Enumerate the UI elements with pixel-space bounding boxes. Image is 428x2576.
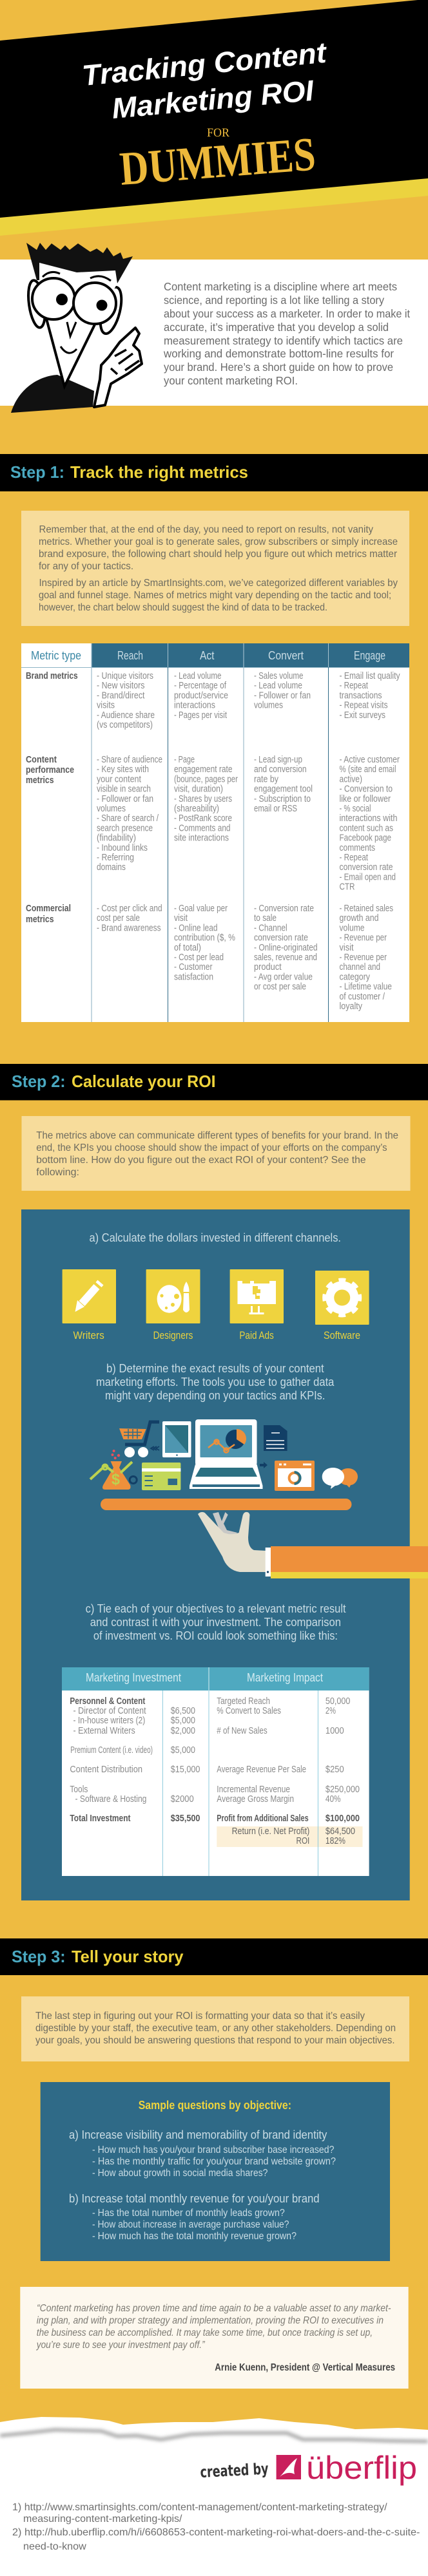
row: content performance metrics: visible in search: [97, 784, 151, 795]
column: impact values: $64,500: [326, 1826, 355, 1837]
metrics table: [21, 643, 409, 1022]
column: impact items: % Convert to Sales: [217, 1706, 281, 1716]
row: content performance metrics: - Repeat: [339, 853, 368, 863]
row: brand metrics: - Pages per visit: [174, 710, 227, 721]
column: impact items: Incremental Revenue: [217, 1785, 290, 1795]
objective a: - How about growth in social media shares?: [92, 2168, 268, 2179]
row: content performance metrics: - Active customer: [339, 755, 400, 765]
quote text: the business can be accomplished. It may take some time, but once tracking is set up,: [37, 2327, 373, 2338]
investment vs impact table: [62, 1667, 369, 1876]
row: brand metrics: - Repeat: [339, 681, 368, 691]
row: commercial metrics: category: [339, 972, 371, 982]
row: commercial metrics: to sale: [254, 913, 277, 923]
row: content performance metrics: - Page: [174, 755, 195, 765]
row: content performance metrics: comments: [339, 843, 375, 853]
quote panel: [20, 2287, 409, 2389]
column: investment amounts: $2,000: [171, 1726, 195, 1736]
panel: step 1 intro: for any of your tactics.: [39, 561, 133, 572]
row: commercial metrics: growth and: [339, 913, 379, 923]
table header: Act: [200, 649, 214, 662]
glasses: [32, 278, 75, 319]
row: content performance metrics: - % social: [339, 804, 371, 814]
table header: Convert: [268, 649, 304, 662]
objective a: [69, 2128, 336, 2179]
column: investment items: Total Investment: [70, 1814, 131, 1824]
label: designers: Designers: [153, 1329, 193, 1341]
objective b: [69, 2192, 320, 2242]
row: content performance metrics: - Key sites with: [97, 764, 149, 775]
row: content performance metrics: metrics: [26, 775, 54, 786]
row: content performance metrics: conversion rate: [339, 862, 393, 873]
objective b: - Has the total number of monthly leads grown?: [92, 2208, 285, 2219]
row: commercial metrics: of customer /: [339, 992, 385, 1002]
intro band: [0, 260, 428, 406]
row: content performance metrics: - Share of search /: [97, 813, 159, 824]
row: content performance metrics: - Subscription to: [254, 794, 311, 804]
column: impact items: [217, 1696, 309, 1846]
intro text: working and demonstrate bottom-line results for: [163, 347, 394, 360]
column: impact items: Targeted Reach: [217, 1696, 270, 1707]
row: commercial metrics: loyalty: [339, 1001, 363, 1012]
title: Tracking Content: [81, 36, 329, 92]
row: content performance metrics: content such as: [339, 823, 393, 833]
row: content performance metrics: - Referring: [97, 853, 134, 863]
panel: step 2 intro: The metrics above can communicate different types of benefits for your brand. In the: [36, 1130, 398, 1141]
panel: step 3 intro: your goals, you should be answering questions that respond to your main objectives.: [35, 2035, 394, 2046]
column: investment items: - External Writers: [73, 1726, 135, 1736]
row: commercial metrics: - Brand awareness: [97, 923, 161, 933]
row: content performance metrics: volumes: [97, 804, 126, 814]
row: content performance metrics: CTR: [339, 882, 355, 893]
references: 2) http://hub.uberflip.com/h/i/6608653-content-marketing-roi-what-doers-and-the-c-suite-: [12, 2527, 420, 2538]
quote text: you’re sure to see your investment pay off.”: [36, 2340, 205, 2351]
row: brand metrics: - Repeat visits: [339, 701, 388, 711]
hand: [198, 1512, 266, 1572]
row: content performance metrics: engagement tool: [254, 784, 313, 795]
row: content performance metrics: - Comments and: [174, 823, 231, 833]
row: content performance metrics: - Lead sign-up: [254, 755, 302, 765]
column: impact values: $250: [326, 1765, 344, 1775]
table headers: [86, 1671, 323, 1684]
row: content performance metrics: and conversion: [254, 764, 307, 775]
step b text: might vary depending on your tactics and KPIs.: [105, 1389, 325, 1402]
column: investment items: Content Distribution: [70, 1765, 142, 1775]
row: commercial metrics: channel and: [339, 962, 380, 972]
row: content performance metrics: domains: [97, 862, 126, 873]
row: brand metrics: - Follower or fan: [254, 690, 311, 701]
icon: red dots: [111, 1450, 120, 1459]
quote attribution: Arnie Kuenn, President @ Vertical Measures: [215, 2362, 395, 2373]
row: content performance metrics: Facebook page: [339, 833, 391, 844]
row: content performance metrics: interactions with: [339, 813, 397, 824]
column: investment items: [70, 1696, 153, 1824]
row: commercial metrics: - Channel: [254, 923, 287, 933]
row: content performance metrics: engagement rate: [174, 764, 232, 775]
row: content performance metrics: [26, 754, 400, 893]
row: brand metrics: - Percentage of: [174, 681, 227, 691]
intro text: your brand. Here’s a short guide on how to prove: [164, 361, 393, 374]
panel: step 3 intro: The last step in figuring out your ROI is formatting your data so that it’s easily: [35, 2011, 365, 2022]
row: commercial metrics: - Customer: [174, 962, 213, 972]
row: content performance metrics: search presence: [97, 823, 153, 833]
references: need-to-know: [23, 2541, 86, 2552]
panel: step 2 intro: bottom line. How do you figure out the exact ROI of your content? See the: [36, 1155, 366, 1166]
icon: dummies character: [11, 243, 142, 413]
step 1 heading: Step 1:: [10, 462, 64, 482]
intro text: measurement strategy to identify which tactics are: [164, 334, 403, 347]
row: content performance metrics: active): [339, 774, 362, 784]
row: content performance metrics: - PostRank score: [174, 813, 232, 824]
column: impact values: 2%: [326, 1706, 336, 1716]
row: commercial metrics: or cost per sale: [254, 982, 306, 992]
step c text: and contrast it with your investment. The comparison: [90, 1616, 341, 1629]
title: Marketing ROI: [110, 74, 316, 125]
icon: browser window: [275, 1461, 315, 1491]
column: impact items: Profit from Additional Sales: [217, 1814, 309, 1824]
icon: credit card: [142, 1463, 180, 1490]
panel: step 1 intro: brand exposure, the following chart should help you figure out which metrics matter: [39, 549, 398, 560]
row: brand metrics: - Sales volume: [254, 671, 303, 681]
row: brand metrics: [26, 670, 400, 730]
icon: uberflip mark: [277, 2455, 301, 2479]
panel: step 1 intro: Inspired by an article by SmartInsights.com, we’ve categorized different variables by: [39, 578, 398, 589]
intro text: accurate, it’s imperative that you develop a solid: [164, 321, 389, 334]
panel: sample questions: [41, 2082, 390, 2261]
objective a: - Has the monthly traffic for you/your brand website grown?: [92, 2156, 336, 2167]
icon: money bag: $: [112, 1471, 121, 1488]
row: content performance metrics: - Share of audience: [97, 755, 162, 765]
panel heading: Sample questions by objective:: [139, 2099, 291, 2112]
header banner: [0, 0, 428, 236]
row: commercial metrics: visit: [174, 913, 188, 923]
row: content performance metrics: visit, duration): [174, 784, 223, 795]
row: brand metrics: - Exit surveys: [339, 710, 385, 721]
references: [12, 2502, 420, 2552]
icon: software gear: [315, 1271, 369, 1325]
row: brand metrics: - Audience share: [97, 710, 155, 721]
table header: Engage: [354, 649, 385, 662]
icon: writers pencil: [63, 1269, 116, 1323]
created by uberflip logo: [200, 2450, 417, 2486]
quote text: [36, 2303, 391, 2351]
row: content performance metrics: site interactions: [174, 833, 229, 844]
column: impact values: $100,000: [326, 1814, 360, 1824]
label: writers: Writers: [73, 1329, 104, 1341]
row: commercial metrics: conversion rate: [254, 933, 308, 943]
created by uberflip logo: überflip: [306, 2450, 417, 2486]
column: investment items: Tools: [70, 1785, 88, 1795]
label: paid ads: Paid Ads: [239, 1329, 274, 1341]
for dummies wordmark: FOR: [207, 126, 229, 140]
step c text: c) Tie each of your objectives to a relevant metric result: [86, 1602, 346, 1615]
row: brand metrics: - Lead volume: [254, 681, 302, 691]
icon: money bag: [90, 1461, 132, 1490]
pointing hand: [94, 328, 142, 407]
step c text: of investment vs. ROI could look something like this:: [93, 1629, 338, 1642]
panel: step 3 intro: [21, 1996, 409, 2061]
row: content performance metrics: - Conversion to: [339, 784, 393, 795]
body: [11, 375, 94, 413]
column: impact values: 40%: [326, 1794, 341, 1804]
column: investment items: - Software & Hosting: [75, 1794, 146, 1804]
row: commercial metrics: satisfaction: [174, 972, 213, 982]
step 3 heading: [0, 1938, 428, 1975]
step 2 heading: Calculate your ROI: [72, 1072, 216, 1091]
row: brand metrics: - Unique visitors: [97, 671, 153, 681]
row: brand metrics: visits: [97, 701, 115, 711]
label: software: Software: [324, 1329, 360, 1341]
row: brand metrics: - Brand/direct: [97, 690, 144, 701]
row: commercial metrics: contribution ($, %: [174, 933, 235, 943]
nose and smile: [61, 322, 77, 353]
panel: calculate ROI: [21, 1209, 410, 1900]
row: content performance metrics: rate by: [254, 774, 279, 784]
panel: step 1 intro: Remember that, at the end of the day, you need to report on results, not vanity: [39, 524, 373, 535]
intro text: about your success as a marketer. In order to make it: [164, 307, 410, 320]
for dummies wordmark: DUMMIES: [118, 128, 317, 196]
row: content performance metrics: % (site and email: [339, 764, 396, 775]
row: content performance metrics: your content: [97, 774, 141, 784]
panel: step 1 intro: [21, 511, 409, 626]
row: content performance metrics: email or RSS: [254, 804, 297, 814]
table header: [31, 649, 385, 662]
illustration: hand serving marketing tools on a tray: [90, 1419, 428, 1578]
row: commercial metrics: [26, 903, 393, 1012]
panel: step 2 intro: end, the KPIs you choose should show the impact of your efforts on the company’s: [36, 1142, 387, 1153]
row: commercial metrics: - Revenue per: [339, 952, 387, 963]
row: content performance metrics: - Shares by users: [174, 794, 232, 804]
table headers: Marketing Impact: [247, 1671, 323, 1684]
torn paper edge: [0, 2417, 428, 2576]
icon: document: [264, 1425, 287, 1451]
step 2 heading: Step 2:: [12, 1072, 66, 1091]
row: commercial metrics: - Revenue per: [339, 933, 387, 943]
highlight: return and ROI: [217, 1826, 362, 1847]
column: investment items: - Director of Content: [73, 1706, 146, 1716]
row: brand metrics: interactions: [174, 701, 215, 711]
column: impact items: Average Revenue Per Sale: [217, 1765, 306, 1775]
row: commercial metrics: - Retained sales: [339, 904, 393, 914]
column: impact items: # of New Sales: [217, 1726, 268, 1736]
table header: Metric type: [31, 649, 81, 662]
panel: step 3 intro: digestible by your staff, the executive team, or any other stakeholders. Depending on: [35, 2023, 396, 2034]
panel: step 2 intro: following:: [36, 1167, 79, 1178]
row: brand metrics: product/service: [174, 690, 228, 701]
column: investment items: Personnel & Content: [70, 1696, 145, 1707]
row: content performance metrics: Content: [26, 754, 57, 765]
column: investment items: - In-house writers (2): [73, 1716, 145, 1726]
row: content performance metrics: - Follower or fan: [97, 794, 153, 804]
objective b: - How about increase in average purchase value?: [92, 2219, 289, 2230]
panel: step 2 intro: [22, 1116, 410, 1191]
row: content performance metrics: (shareability): [174, 804, 219, 814]
step 2 heading: [0, 1064, 428, 1100]
objective a: a) Increase visibility and memorability of brand identity: [69, 2128, 327, 2141]
quote text: ing plan, and with proper strategy and implementation, proving the ROI to executives in: [37, 2315, 384, 2326]
step b text: [96, 1362, 335, 1402]
step 3 heading: Step 3:: [12, 1947, 66, 1966]
icon: speech bubbles: [322, 1468, 358, 1489]
column: investment items: Premium Content (i.e. video): [70, 1745, 153, 1756]
row: content performance metrics: (findability): [97, 833, 136, 844]
face: [39, 264, 117, 386]
hair: [26, 243, 133, 283]
intro text: Content marketing is a discipline where art meets: [164, 280, 397, 293]
column: impact values: 1000: [326, 1726, 344, 1736]
row: commercial metrics: - Cost per click and: [97, 904, 162, 914]
icon: small gear: [130, 1476, 137, 1484]
row: content performance metrics: performance: [26, 764, 74, 775]
row: commercial metrics: product: [254, 962, 282, 972]
step 1 heading: Track the right metrics: [70, 462, 248, 482]
references: measuring-content-marketing-kpis/: [23, 2514, 182, 2524]
tray: [101, 1499, 352, 1510]
column: investment amounts: $2000: [171, 1794, 194, 1804]
objective b: b) Increase total monthly revenue for you/your brand: [69, 2192, 320, 2205]
icon: designers palette: [146, 1269, 200, 1323]
step a text: a) Calculate the dollars invested in different channels.: [89, 1231, 341, 1244]
row: commercial metrics: - Cost per lead: [174, 952, 224, 963]
step b text: marketing efforts. The tools you use to gather data: [96, 1376, 335, 1388]
row: commercial metrics: - Lifetime value: [339, 982, 392, 992]
row: content performance metrics: - Inbound links: [97, 843, 148, 853]
eyebrows: [43, 272, 111, 281]
table header: Reach: [117, 649, 143, 662]
column: investment amounts: [171, 1706, 200, 1824]
step c text: [86, 1602, 346, 1642]
column: impact values: 182%: [326, 1836, 345, 1846]
column: impact values: [326, 1696, 360, 1846]
step 3 heading: Tell your story: [72, 1947, 184, 1966]
row: commercial metrics: visit: [339, 943, 353, 953]
row: content performance metrics: (bounce, pages per: [174, 774, 238, 784]
intro text: your content marketing ROI.: [164, 374, 298, 387]
step 1 heading: [0, 454, 428, 491]
row: content performance metrics: like or follower: [339, 794, 391, 804]
references: 1) http://www.smartinsights.com/content-management/content-marketing-strategy/: [12, 2502, 387, 2513]
title: [81, 36, 329, 125]
sleeve and cuff: [266, 1546, 428, 1578]
column: investment amounts: $15,000: [171, 1765, 200, 1775]
ears: [26, 279, 48, 328]
icon: shopping cart: [119, 1422, 159, 1457]
row: commercial metrics: - Goal value per: [174, 904, 228, 914]
icon: laptop: [190, 1419, 263, 1489]
row: commercial metrics: metrics: [26, 914, 54, 925]
row: commercial metrics: - Conversion rate: [254, 904, 314, 914]
row: content performance metrics: - Email open and: [339, 872, 396, 882]
row: commercial metrics: of total): [174, 943, 201, 953]
row: brand metrics: - Email list quality: [339, 671, 400, 681]
icon: paid ads billboard: [230, 1269, 284, 1323]
table headers: Marketing Investment: [86, 1671, 181, 1684]
column: impact values: 50,000: [326, 1696, 350, 1707]
icon: tablet: [162, 1421, 191, 1457]
panel: step 1 intro: metrics. Whether your goal is to generate sales, grow subscribers or simply increase: [39, 536, 398, 547]
column: impact items: Average Gross Margin: [217, 1794, 294, 1804]
objective a: - How much has you/your brand subscriber base increased?: [92, 2145, 335, 2155]
row: commercial metrics: - Online lead: [174, 923, 218, 933]
column: investment amounts: $5,000: [171, 1745, 195, 1756]
objective b: - How much has the total monthly revenue grown?: [92, 2231, 297, 2242]
icon: small arrow: [260, 1462, 268, 1468]
step b text: b) Determine the exact results of your content: [106, 1362, 324, 1375]
row: commercial metrics: Commercial: [26, 903, 71, 914]
created by uberflip logo: created by: [200, 2459, 269, 2481]
row: commercial metrics: - Avg order value: [254, 972, 313, 982]
row: brand metrics: - New visitors: [97, 681, 144, 691]
row: brand metrics: transactions: [339, 690, 382, 701]
column: impact items: ROI: [297, 1836, 309, 1846]
column: impact values: $250,000: [326, 1785, 360, 1795]
row: commercial metrics: sales, revenue and: [254, 952, 317, 963]
row: commercial metrics: cost per sale: [97, 913, 140, 923]
row: brand metrics: (vs competitors): [97, 720, 153, 730]
column: investment amounts: $6,500: [171, 1706, 195, 1716]
column: investment amounts: $35,500: [171, 1814, 200, 1824]
row: commercial metrics: - Online-originated: [254, 943, 318, 953]
row: commercial metrics: volume: [339, 923, 365, 933]
column: investment amounts: $5,000: [171, 1716, 195, 1726]
row: brand metrics: Brand metrics: [26, 670, 78, 681]
intro text: science, and reporting is a lot like telling a story: [164, 294, 384, 307]
row: brand metrics: volumes: [254, 701, 283, 711]
column: impact items: Return (i.e. Net Profit): [232, 1826, 309, 1837]
intro text: [163, 280, 410, 387]
panel: step 1 intro: goal and funnel stage. Names of metrics might vary depending on the tactic and tool;: [39, 590, 391, 601]
row: brand metrics: - Lead volume: [174, 671, 222, 681]
panel: step 1 intro: however, the chart below should suggest the kind of data to be tracked.: [39, 602, 327, 613]
